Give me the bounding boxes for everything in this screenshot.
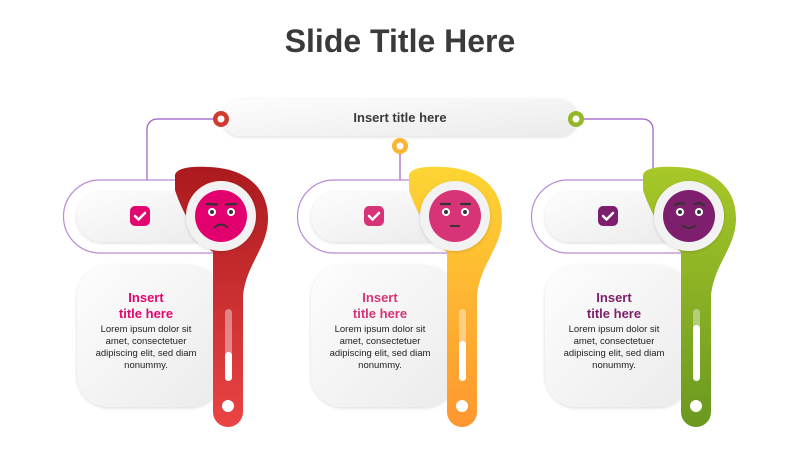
- panel: item 2: amet, consectetuer: [340, 336, 420, 347]
- panel: item 3: adipiscing elit, sed diam: [564, 348, 665, 359]
- panel: item 2: nonummy.: [358, 360, 402, 371]
- top title pill: [222, 99, 578, 136]
- card text: Insert: [596, 290, 632, 305]
- text card: [545, 265, 690, 407]
- title: Slide Title Here: [285, 23, 515, 59]
- panel: item 3: nonummy.: [592, 360, 636, 371]
- outline pill: [532, 180, 693, 253]
- outline pill: [64, 180, 225, 253]
- outline pill: [298, 180, 459, 253]
- connector dots: [213, 111, 584, 154]
- panel: item 1: nonummy.: [124, 360, 168, 371]
- card text: Insert: [362, 290, 398, 305]
- panel: item 2: adipiscing elit, sed diam: [330, 348, 431, 359]
- face: [420, 181, 490, 251]
- text card: [77, 265, 222, 407]
- card text: Insert: [128, 290, 164, 305]
- panel: item 1: adipiscing elit, sed diam: [96, 348, 197, 359]
- progress bar: [225, 309, 232, 381]
- card text: title here: [353, 306, 407, 321]
- stem shape: [643, 167, 736, 427]
- stem shape: [175, 167, 268, 427]
- text card: [311, 265, 456, 407]
- panel: item 3: [532, 167, 736, 427]
- connector lines: [147, 119, 653, 180]
- progress bar: [459, 309, 466, 381]
- panel: item 1: [64, 167, 268, 427]
- panel: item 3: Lorem ipsum dolor sit: [569, 324, 660, 335]
- stem shape: [409, 167, 502, 427]
- icon: check: [130, 206, 150, 226]
- top title pill: Insert title here: [353, 110, 447, 125]
- card text: title here: [587, 306, 641, 321]
- card text: title here: [119, 306, 173, 321]
- inner pill: [77, 192, 217, 242]
- icon: check: [598, 206, 618, 226]
- face: [654, 181, 724, 251]
- icon: check: [364, 206, 384, 226]
- inner pill: [311, 192, 451, 242]
- panel: item 3: amet, consectetuer: [574, 336, 654, 347]
- panel: item 1: amet, consectetuer: [106, 336, 186, 347]
- panel: item 2: [298, 167, 502, 427]
- panel: item 1: Lorem ipsum dolor sit: [101, 324, 192, 335]
- panel: item 2: Lorem ipsum dolor sit: [335, 324, 426, 335]
- inner pill: [545, 192, 685, 242]
- face: [186, 181, 256, 251]
- progress bar: [693, 309, 700, 381]
